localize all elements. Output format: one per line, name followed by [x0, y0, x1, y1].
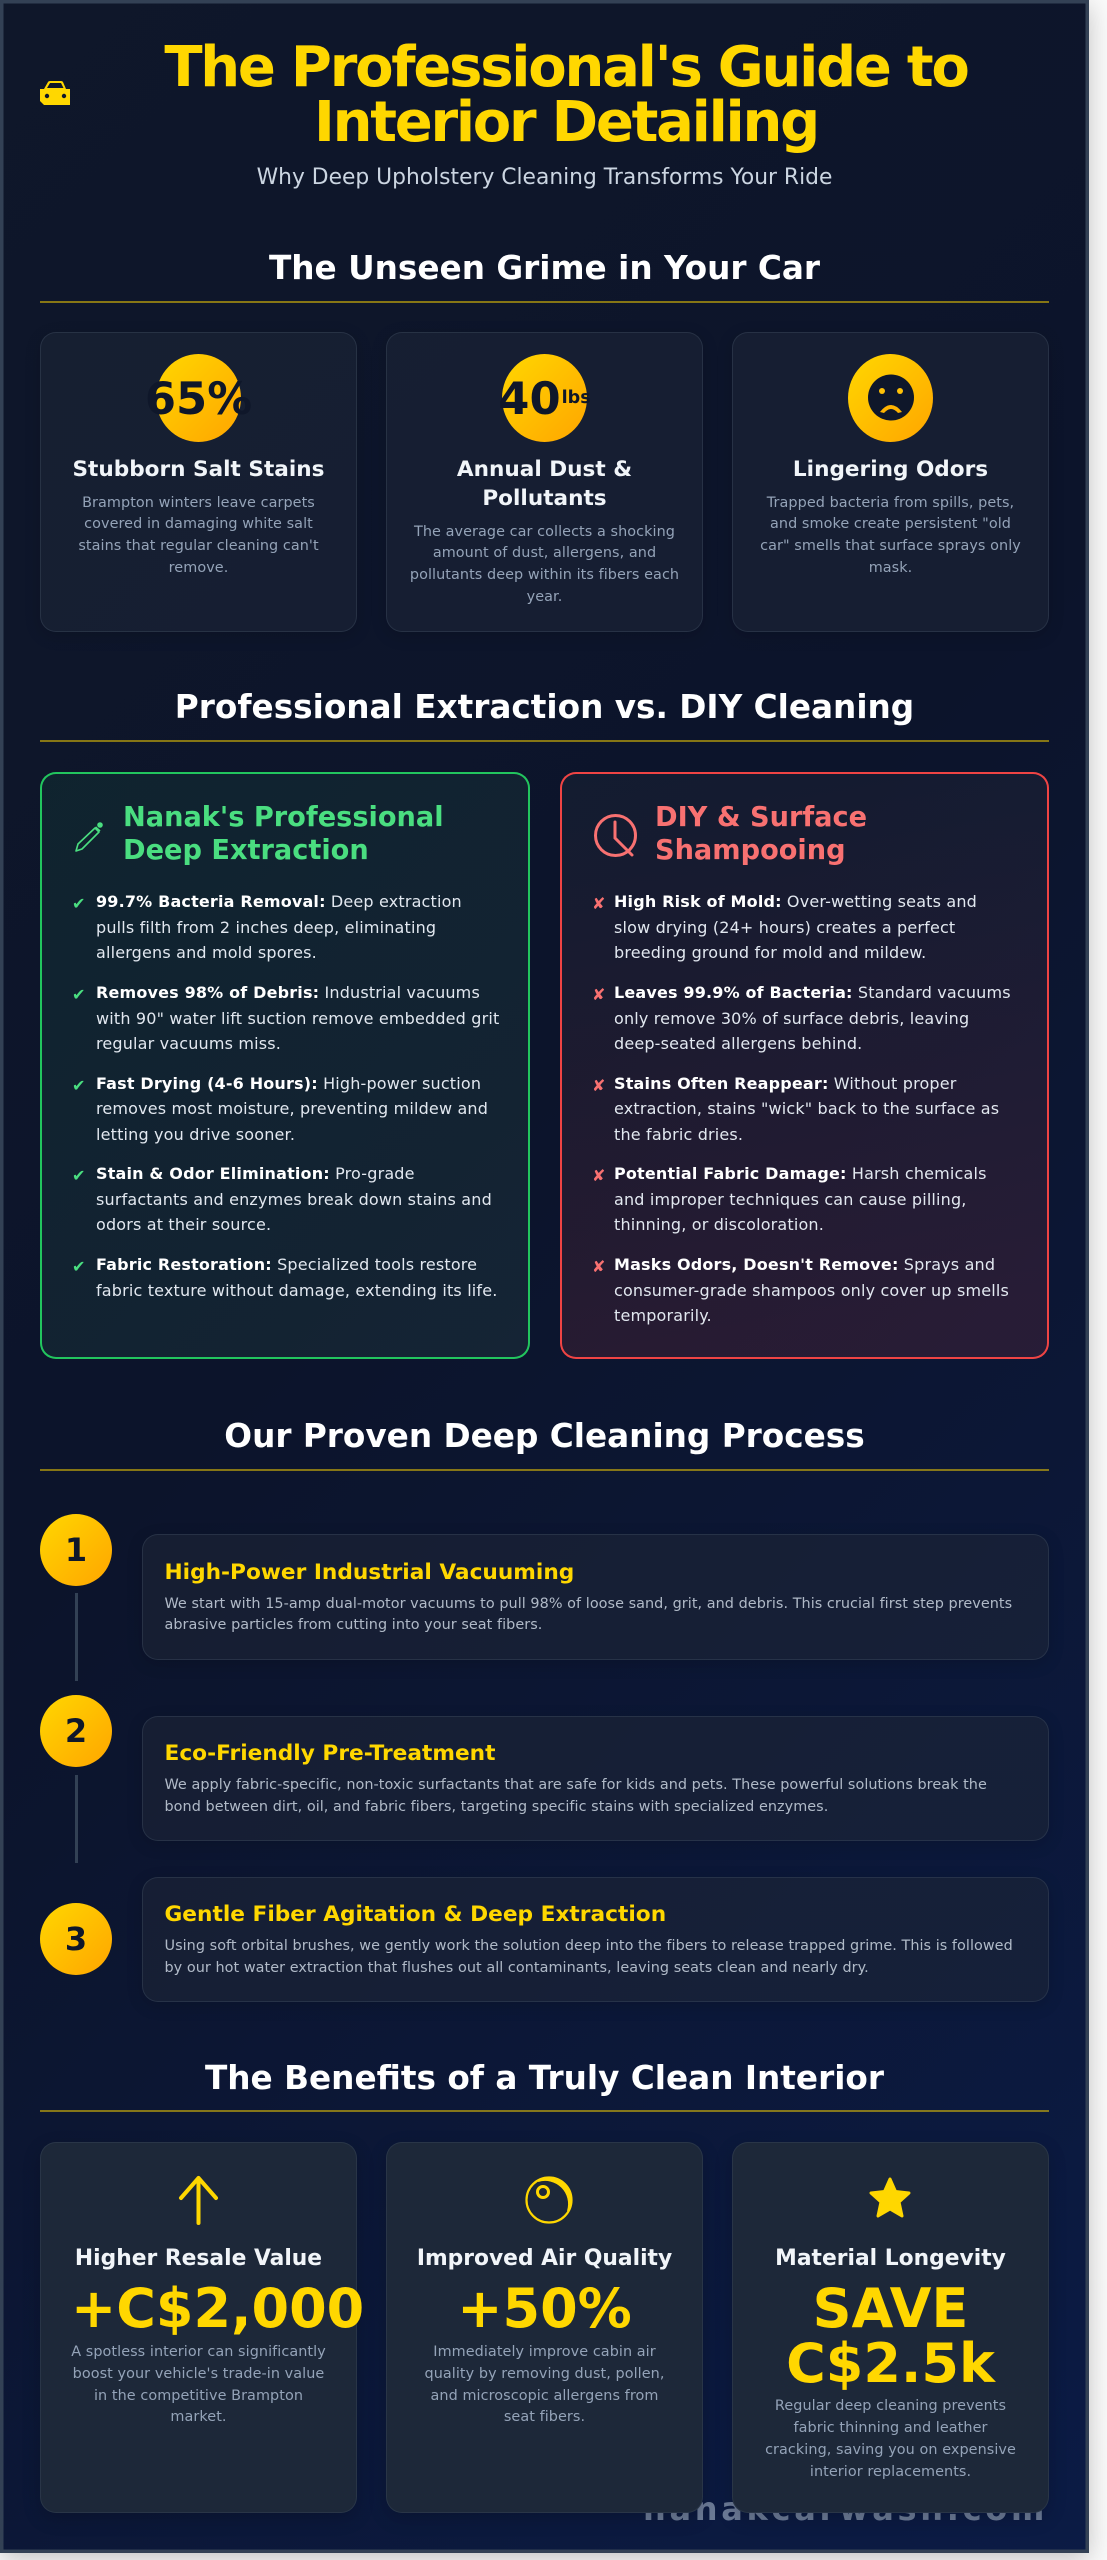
benefit: fast drying: ✔	[72, 1076, 86, 1095]
step text: by our hot water extraction that flushes out all contaminants, leaving seats clean and nearly dry.	[164, 1960, 869, 1976]
drawback: stains: the fabric dries.	[614, 1125, 743, 1144]
step 3 card	[142, 1877, 1049, 2002]
panel heading	[123, 802, 444, 866]
drawback: stains	[592, 1074, 999, 1144]
card text: and smoke create persistent "old	[770, 516, 1011, 532]
drawback: bacteria	[592, 983, 1011, 1053]
benefit: fast drying: removes most moisture, preventing mildew and	[96, 1099, 488, 1118]
benefit: fabric restoration: ✔	[72, 1257, 86, 1276]
heading: process: Our Proven Deep Cleaning Process	[224, 1417, 865, 1455]
step text: We apply fabric-specific, non-toxic surfactants that are safe for kids and pets. These powerful solutions break the	[164, 1777, 987, 1793]
card title: Annual Dust &	[457, 457, 632, 482]
step 2 card	[142, 1716, 1049, 1841]
step title: Gentle Fiber Agitation & Deep Extraction	[164, 1902, 666, 1927]
panel heading: DIY & Surface	[655, 802, 867, 833]
step title: Eco-Friendly Pre-Treatment	[164, 1741, 495, 1766]
benefit: bacteria removal: ✔	[72, 894, 86, 913]
drawback: masks odors: temporarily.	[614, 1306, 712, 1325]
benefit: stain and odor	[72, 1164, 492, 1234]
icon: air ring	[525, 2176, 573, 2224]
panel: higher resale value	[40, 2142, 357, 2513]
card text	[424, 2344, 664, 2425]
drawback: fabric damage	[592, 1164, 987, 1234]
card title: Stubborn Salt Stains	[72, 457, 324, 482]
benefit: debris: Removes 98% of Debris: Industrial vacuums	[96, 983, 480, 1002]
heading: benefits: The Benefits of a Truly Clean Interior	[205, 2059, 884, 2097]
panel: stubborn salt stains	[40, 332, 357, 632]
card text: A spotless interior can significantly	[71, 2344, 326, 2360]
benefit: stain and odor: odors at their source.	[96, 1215, 271, 1234]
step 1 number: 1	[65, 1531, 87, 1569]
card text: seat fibers.	[504, 2409, 585, 2425]
drawback: mold: High Risk of Mold: Over-wetting seats and	[614, 892, 977, 911]
stat: 65%	[156, 354, 241, 442]
step text	[164, 1938, 1013, 1976]
card text: interior replacements.	[810, 2464, 971, 2480]
card text: stains that regular cleaning can't	[78, 538, 319, 554]
step text	[164, 1777, 987, 1815]
step 1 card	[142, 1534, 1049, 1660]
card text: market.	[170, 2409, 227, 2425]
heading: the unseen grime: The Unseen Grime in Your Car	[269, 249, 820, 287]
drawback: mold: slow drying (24+ hours) creates a perfect	[614, 918, 955, 937]
drawback: masks odors	[592, 1255, 1009, 1325]
drawback: stains: extraction, stains "wick" back to the surface as	[614, 1099, 999, 1118]
card text: mask.	[869, 560, 912, 576]
panel heading: Deep Extraction	[123, 835, 369, 866]
card text	[760, 495, 1021, 576]
step text: abrasive particles from cutting into your seat fibers.	[164, 1617, 542, 1633]
step 1 number	[40, 1514, 112, 1586]
card title: Material Longevity	[775, 2246, 1006, 2271]
drawback: masks odors: consumer-grade shampoos only cover up smells	[614, 1281, 1009, 1300]
benefit: debris: ✔	[72, 985, 86, 1004]
benefit: fast drying: Fast Drying (4-6 Hours): High-power suction	[96, 1074, 481, 1093]
card text: year.	[527, 589, 562, 605]
card text: pollutants deep within its fibers each	[410, 567, 679, 583]
watermark: nanakcarwash.com	[643, 2490, 1048, 2528]
stat: 40 lbs: lbs	[562, 388, 591, 408]
card text: remove.	[169, 560, 228, 576]
big stat: C$2.5k	[786, 2332, 995, 2395]
step 2 number	[40, 1695, 112, 1767]
drawback: bacteria: ✘	[592, 985, 606, 1004]
step text	[164, 1596, 1012, 1633]
benefit: debris	[72, 983, 499, 1053]
panel: professional extraction	[40, 772, 530, 1359]
benefit: bacteria removal: pulls filth from 2 inches deep, eliminating	[96, 918, 436, 937]
card text	[410, 524, 679, 605]
big stat: SAVE	[813, 2277, 968, 2340]
step title: High-Power Industrial Vacuuming	[164, 1560, 574, 1585]
card title: Lingering Odors	[793, 457, 988, 482]
stat: 65%: 65%	[145, 372, 252, 424]
card text	[765, 2398, 1016, 2480]
drawback: bacteria: Leaves 99.9% of Bacteria: Standard vacuums	[614, 983, 1011, 1002]
drawback: bacteria: only remove 30% of surface debris, leaving	[614, 1008, 969, 1028]
panel: diy shampooing	[560, 772, 1049, 1359]
icon: pen	[75, 822, 103, 852]
benefit: fabric restoration	[72, 1255, 498, 1300]
icon: star	[869, 2178, 910, 2218]
drawback: stains: ✘	[592, 1076, 606, 1095]
benefit: fabric restoration: Fabric Restoration: Specialized tools restore	[96, 1255, 477, 1274]
benefit: debris: regular vacuums miss.	[96, 1034, 281, 1053]
icon: clock	[594, 814, 637, 857]
benefit: fabric restoration: fabric texture without damage, extending its life.	[96, 1281, 498, 1300]
title	[164, 35, 968, 155]
drawback: bacteria: deep-seated allergens behind.	[614, 1034, 862, 1053]
card text: Brampton winters leave carpets	[82, 495, 315, 511]
drawback: masks odors: ✘	[592, 1257, 606, 1276]
card text: fabric thinning and leather	[794, 2420, 988, 2436]
panel: improved air quality	[386, 2142, 703, 2513]
card text: Trapped bacteria from spills, pets,	[767, 495, 1014, 511]
step text: Using soft orbital brushes, we gently work the solution deep into the fibers to release trapped grime. This is followed	[164, 1938, 1013, 1954]
drawback: stains: Stains Often Reappear: Without proper	[614, 1074, 957, 1093]
big stat	[786, 2277, 996, 2395]
benefit: bacteria removal: 99.7% Bacteria Removal: Deep extraction	[96, 892, 462, 911]
panel heading: Shampooing	[655, 835, 846, 866]
drawback: masks odors: Masks Odors, Doesn't Remove: Sprays and	[614, 1255, 995, 1274]
heading: professional vs diy: Professional Extraction vs. DIY Cleaning	[175, 688, 914, 726]
card title: Pollutants	[482, 486, 607, 511]
drawback: fabric damage: ✘	[592, 1166, 606, 1185]
card text: amount of dust, allergens, and	[433, 545, 656, 561]
benefit: fast drying: letting you drive sooner.	[96, 1125, 295, 1144]
drawback: fabric damage: thinning, or discoloration.	[614, 1215, 824, 1234]
step text: We start with 15-amp dual-motor vacuums to pull 98% of loose sand, grit, and debris. This crucial first step prevents	[164, 1596, 1012, 1612]
stat: 40 lbs: 40	[498, 372, 561, 424]
panel heading: Nanak's Professional	[123, 802, 444, 833]
card text: in the competitive Brampton	[94, 2388, 303, 2404]
step 2 number: 2	[65, 1712, 87, 1750]
benefit: bacteria removal: allergens and mold spores.	[96, 943, 317, 962]
benefit: fast drying	[72, 1074, 488, 1144]
card title: Higher Resale Value	[75, 2246, 322, 2271]
benefit: stain and odor: Stain & Odor Elimination: Pro-grade	[96, 1164, 415, 1183]
benefit: debris: with 90" water lift suction remove embedded grit	[96, 1008, 499, 1028]
drawback: mold	[592, 892, 977, 962]
benefit: bacteria removal	[72, 892, 462, 962]
card text: The average car collects a shocking	[414, 524, 675, 540]
panel: lingering odors	[732, 332, 1049, 632]
panel: material longevity	[732, 2142, 1049, 2513]
card text	[71, 2344, 326, 2425]
card text: Regular deep cleaning prevents	[775, 2398, 1006, 2414]
step 3 number	[40, 1903, 112, 1975]
drawback: mold: breeding ground for mold and mildew.	[614, 943, 926, 962]
card text: covered in damaging white salt	[84, 516, 313, 532]
card text: and microscopic allergens from	[431, 2388, 658, 2404]
step text: bond between dirt, oil, and fabric fibers, targeting specific stains with specialized enzymes.	[164, 1799, 828, 1815]
icon: car	[40, 81, 70, 105]
drawback: fabric damage: and improper techniques can cause pilling,	[614, 1190, 967, 1209]
card text	[78, 495, 319, 576]
card title	[457, 457, 632, 511]
card text: quality by removing dust, pollen,	[424, 2366, 664, 2382]
card text: boost your vehicle's trade-in value	[73, 2366, 324, 2382]
panel heading	[655, 802, 867, 866]
card text: cracking, saving you on expensive	[765, 2442, 1016, 2458]
card title: Improved Air Quality	[417, 2246, 672, 2271]
drawback: fabric damage: Potential Fabric Damage: Harsh chemicals	[614, 1164, 987, 1183]
icon: sad face	[848, 354, 933, 442]
title: The Professional's Guide to	[164, 35, 968, 100]
big stat: +C$2,000	[71, 2277, 364, 2340]
benefit: stain and odor: ✔	[72, 1166, 86, 1185]
subtitle: Why Deep Upholstery Cleaning Transforms Your Ride	[257, 165, 832, 190]
panel: annual dust and pollutants	[386, 332, 703, 632]
benefit: stain and odor: surfactants and enzymes break down stains and	[96, 1190, 492, 1209]
icon: up arrow	[178, 2176, 218, 2225]
stat: 40 lbs	[502, 354, 587, 442]
drawback: mold: ✘	[592, 894, 606, 913]
title: Interior Detailing	[314, 90, 818, 155]
card text: car" smells that surface sprays only	[760, 538, 1021, 554]
big stat: +50%	[457, 2277, 632, 2340]
step 3 number: 3	[65, 1920, 87, 1958]
card text: Immediately improve cabin air	[433, 2344, 656, 2360]
